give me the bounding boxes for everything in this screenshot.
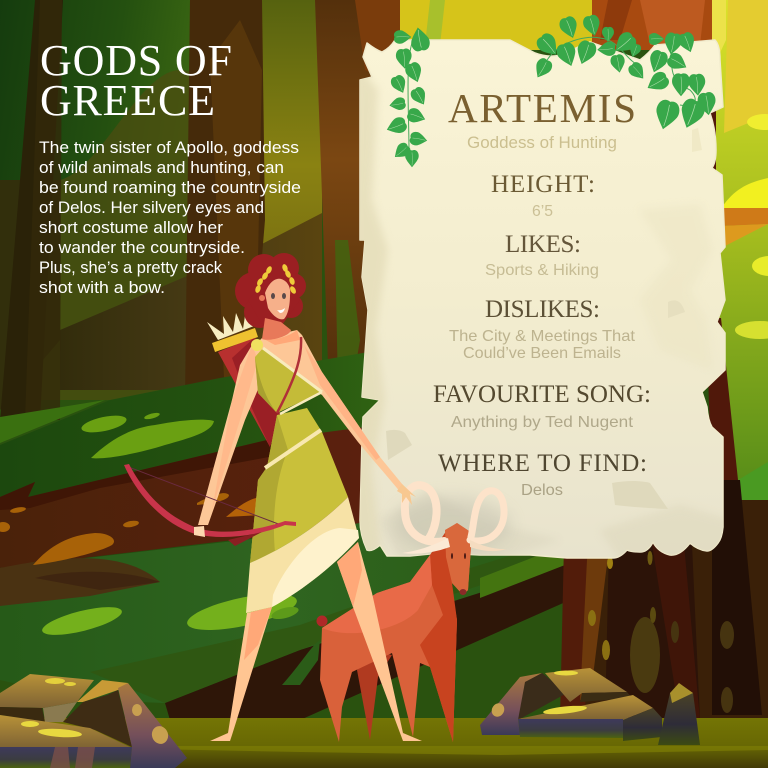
- grass ground: [0, 718, 768, 768]
- left rocks: [0, 674, 187, 768]
- forest floor hills and path: [0, 350, 570, 720]
- bow: [124, 464, 296, 546]
- trunks behind the rocks: [560, 480, 768, 725]
- intro text: [39, 139, 301, 297]
- title: [40, 36, 232, 125]
- fact: favourite song: FAVOURITE SONG:: [433, 381, 651, 408]
- intro text: of Delos. Her silvery eyes and: [39, 199, 264, 217]
- horn shadow on parchment: [394, 497, 510, 553]
- fact: height: [491, 171, 595, 220]
- archer: arms and torso: [198, 330, 407, 525]
- intro text: shot with a bow.: [39, 279, 165, 297]
- panel heading: Artemis: [448, 85, 636, 152]
- panel heading: Artemis: Goddess of Hunting: [467, 134, 617, 152]
- fact: dislikes: [449, 296, 636, 362]
- fact: where to find: WHERE TO FIND:: [438, 450, 647, 477]
- parchment panel: [352, 40, 730, 560]
- archer: hair and head: [235, 253, 306, 340]
- fact: height: 6’5: [532, 203, 553, 220]
- deer horns: [402, 485, 507, 554]
- dappled light patches: [0, 412, 300, 641]
- intro text: The twin sister of Apollo, goddess: [39, 139, 299, 157]
- fact: likes: [485, 231, 599, 279]
- panel heading: Artemis: ARTEMIS: [448, 85, 636, 131]
- quiver of arrows: [207, 309, 280, 447]
- fact: likes: LIKES:: [505, 231, 581, 258]
- vine: top right: [643, 31, 718, 132]
- intro text: to wander the countryside.: [39, 239, 245, 257]
- fact: dislikes: The City & Meetings That: [449, 328, 636, 345]
- fact: favourite song: [433, 381, 651, 431]
- title: GREECE: [40, 76, 215, 125]
- fact: where to find: [438, 450, 647, 499]
- title: GODS OF: [40, 36, 232, 85]
- intro text: of wild animals and hunting, can: [39, 159, 284, 177]
- fact: height: HEIGHT:: [491, 171, 595, 198]
- vine: left side: [384, 26, 431, 167]
- fact: dislikes: Could’ve Been Emails: [463, 345, 621, 362]
- archer: hand on horn: [397, 484, 416, 505]
- fact: likes: Sports & Hiking: [485, 262, 599, 279]
- right rocks: [480, 668, 700, 745]
- archer: dress: [246, 337, 359, 613]
- intro text: Plus, she’s a pretty crack: [39, 259, 223, 277]
- fact: favourite song: Anything by Ted Nugent: [451, 414, 634, 431]
- deer: [316, 523, 472, 742]
- vine: top centre: [531, 14, 649, 83]
- fact: where to find: Delos: [521, 482, 563, 499]
- fact: dislikes: DISLIKES:: [485, 296, 600, 323]
- intro text: be found roaming the countryside: [39, 179, 301, 197]
- archer: legs: [210, 542, 422, 741]
- intro text: short costume allow her: [39, 219, 224, 237]
